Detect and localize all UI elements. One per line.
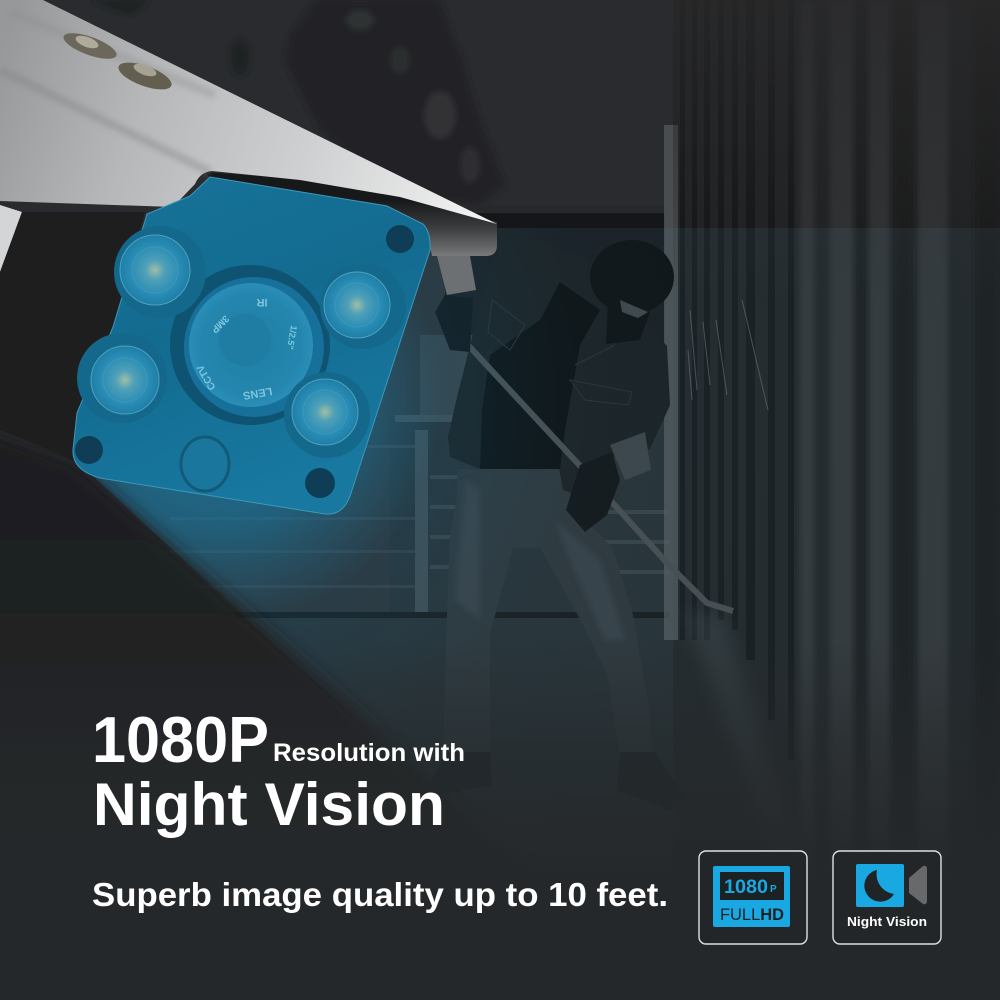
led top right xyxy=(320,263,406,349)
camera body lower xyxy=(0,205,22,272)
under hood xyxy=(205,172,497,256)
main lens xyxy=(170,265,330,425)
subtitle: Superb image quality up to 10 feet. xyxy=(92,876,668,913)
left dark area xyxy=(0,425,620,1000)
main lens: 1/2.5" xyxy=(285,325,299,350)
led top left xyxy=(114,226,206,318)
led bottom left xyxy=(77,333,167,423)
title: Night Vision xyxy=(93,771,445,838)
main lens: IR xyxy=(256,296,268,308)
badge: night vision: Night Vision xyxy=(847,914,927,929)
mounting screws xyxy=(61,28,175,95)
person xyxy=(435,228,733,758)
badge: 1080p Full HD: FULLHD xyxy=(720,905,784,924)
main lens: CCTV xyxy=(195,362,218,392)
bottom fade xyxy=(0,640,1000,885)
ground xyxy=(150,618,800,900)
icon: moon camera xyxy=(856,864,927,907)
blue face plate xyxy=(73,177,430,514)
main lens: LENS xyxy=(242,384,273,401)
title: 1080P xyxy=(92,703,269,776)
railing xyxy=(170,415,670,618)
camera bracket xyxy=(437,256,476,295)
title: Resolution with xyxy=(273,739,465,767)
title xyxy=(92,703,465,838)
gloves xyxy=(435,295,473,352)
camera xyxy=(0,0,497,514)
badge: 1080p Full HD xyxy=(699,851,807,944)
jacket seams xyxy=(488,300,632,405)
crowbar xyxy=(467,344,733,611)
badge: night vision xyxy=(833,851,941,944)
light beam xyxy=(70,228,1000,1000)
badge: 1080p Full HD: 1080 xyxy=(724,877,768,898)
led bottom right xyxy=(284,372,370,458)
shoes xyxy=(428,752,685,810)
building behind xyxy=(390,205,670,622)
screws and sensor xyxy=(75,225,414,498)
tree silhouette xyxy=(90,0,505,205)
hood xyxy=(0,0,497,224)
badge: 1080p Full HD: P xyxy=(770,884,777,895)
right fence xyxy=(664,0,1000,900)
main lens: 3MP xyxy=(208,313,231,335)
